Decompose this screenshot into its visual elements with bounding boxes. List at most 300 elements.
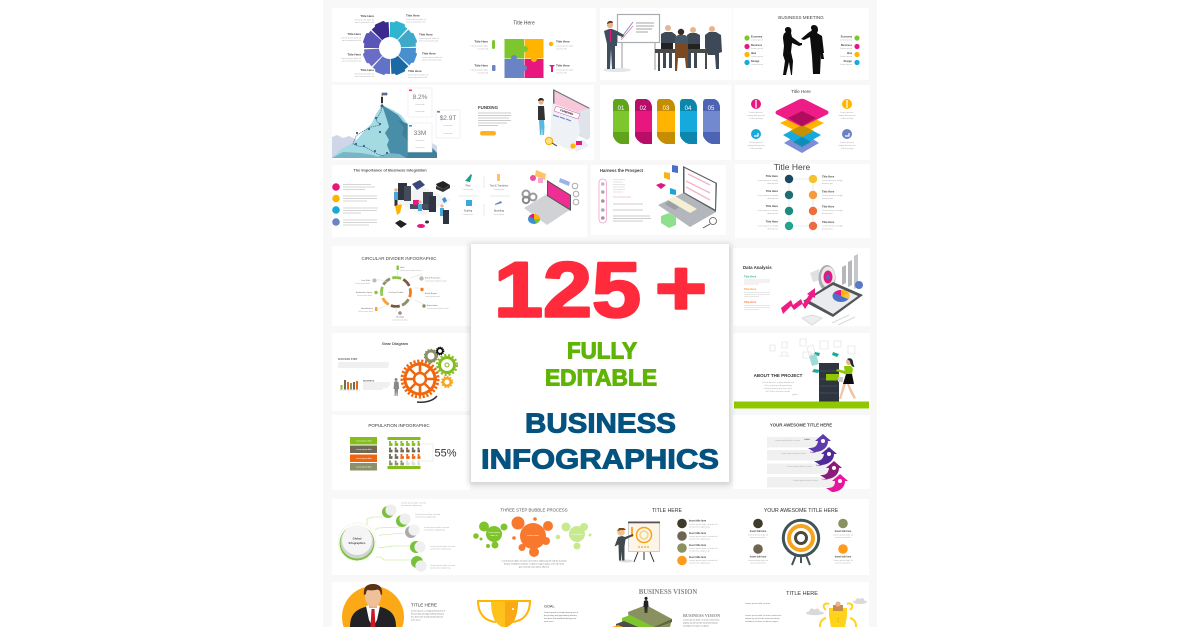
- funding person: [538, 98, 545, 135]
- headline number: 125: [494, 246, 641, 334]
- vision text: adipiscing elit sed do eiusmod tempor: [683, 622, 718, 624]
- process texts: Lorem ipsum dolor sit amet: [430, 564, 455, 567]
- magnifier and documents: [545, 137, 589, 152]
- process texts: consectetur adipiscing: [430, 548, 451, 550]
- panel: gear diagram: [332, 333, 470, 411]
- gear ring labels: Title Here: [419, 32, 433, 36]
- left icon list: [744, 35, 763, 66]
- trainer legend text: consectetur adipiscing: [689, 550, 710, 552]
- businessman text: ever since: [411, 618, 421, 622]
- tab 02: 02: [640, 106, 647, 112]
- funding body text: [478, 113, 511, 126]
- puzzle labels: Lorem ipsum dolor: [556, 44, 574, 48]
- about body: of the printing and typesetting: [764, 384, 792, 387]
- orange circle with portrait: [342, 584, 404, 627]
- gear ring labels: Title Here: [360, 14, 374, 18]
- puzzle labels: sit amet elit: [556, 72, 567, 74]
- puzzle icons: [492, 40, 555, 72]
- right icon list: [840, 35, 860, 66]
- left timeline nodes: Title Here: [766, 174, 779, 178]
- ring labels: Evaluation Group: [356, 291, 373, 294]
- gear ring labels: amet consectetur elit: [408, 76, 428, 79]
- process texts: consectetur adipiscing: [430, 566, 451, 570]
- feature labels: Lorem ipsum: [494, 189, 505, 191]
- target legend: amet consectetur: [750, 536, 766, 539]
- stat card: 33M: [408, 123, 432, 152]
- mountain illustration: [332, 93, 437, 158]
- layer captions: of the printing: [750, 147, 763, 150]
- layer captions: simply dummy text: [747, 144, 765, 147]
- about body: galley: [792, 394, 799, 396]
- puzzle labels: Lorem ipsum dolor: [471, 44, 488, 48]
- mascot text: incididunt ut labore et dolore magna: [745, 620, 779, 623]
- bubble captions: dolor sit: [490, 534, 498, 537]
- pink pill with icons: [599, 179, 606, 223]
- target stand: [792, 555, 810, 565]
- stacked diamonds: [776, 99, 828, 153]
- about body: the 1500s unknown printer: [766, 390, 791, 393]
- layer captions: of the printing: [841, 147, 854, 150]
- right icon list: Lorem ipsum: [840, 47, 852, 50]
- data analysis notes: Title Here: [744, 274, 757, 278]
- right timeline nodes: Title Here: [822, 190, 835, 194]
- left icon list: Lorem ipsum: [751, 63, 763, 66]
- about title: ABOUT THE PROJECT: [754, 373, 803, 378]
- panel: puzzle: [460, 8, 596, 82]
- right timeline nodes: Title Here: [822, 220, 835, 224]
- left timeline nodes: Lorem ipsum is simply: [757, 179, 779, 182]
- fully editable label: FULLY: [567, 338, 637, 364]
- trainer legend text: Lorem ipsum dolor sit amet elit: [689, 535, 718, 538]
- grey text bars: Lorem ipsum dolor sit amet: [781, 452, 806, 455]
- target legend: Lorem ipsum dolor sit: [833, 559, 853, 562]
- gear text: BUSINESS: [363, 380, 375, 382]
- population stacked labels: Lorem ipsum dolor: [356, 448, 372, 451]
- ring labels: Expectation: [427, 304, 439, 307]
- timeline title: Title Here: [774, 162, 811, 172]
- puzzle labels: sit amet elit: [556, 48, 567, 50]
- puzzle labels: sit amet elit: [477, 72, 488, 74]
- gear ring labels: Title Here: [406, 14, 420, 18]
- right timeline nodes: dummy text: [822, 212, 833, 215]
- left icon list: Economy: [751, 36, 763, 38]
- left timeline nodes: dummy text: [767, 228, 778, 230]
- collage backdrop: [323, 0, 877, 627]
- layer captions: of the printing: [841, 117, 854, 120]
- feature labels: [463, 184, 509, 216]
- right icon list: Lorem ipsum: [840, 55, 852, 58]
- business vision title: BUSINESS VISION: [639, 589, 697, 596]
- gear ring labels: Lorem ipsum dolor sit: [341, 57, 361, 60]
- right icon list: Idea: [847, 52, 853, 55]
- about body: Lorem ipsum is simply dummy text: [762, 381, 794, 384]
- businessman text: Lorem ipsum is simply dummy text of: [411, 610, 446, 612]
- stat card: $2.9T: [436, 110, 460, 138]
- target legend: Insert title here: [750, 556, 767, 558]
- funding button: [480, 131, 496, 136]
- ring labels: Strategy: [396, 316, 405, 318]
- puzzle pieces: [504, 39, 544, 78]
- gear ring labels: Lorem ipsum dolor sit: [341, 36, 361, 40]
- right timeline nodes: [809, 174, 844, 230]
- stat card: 33M: Lorem ipsum: [415, 147, 425, 149]
- book figure: [643, 597, 649, 613]
- gear ring labels: Lorem ipsum dolor sit: [408, 74, 428, 76]
- ring labels: Lorem ipsum dolor: [358, 311, 373, 313]
- stat card: 33M: 33M: [414, 130, 426, 137]
- businessman title: TITLE HERE: [411, 602, 437, 608]
- left icon list: Idea: [751, 52, 757, 55]
- process texts: Lorem ipsum dolor sit amet: [430, 545, 455, 548]
- trainer legend text: Lorem ipsum dolor sit amet elit: [689, 547, 718, 550]
- gear ring labels: Lorem ipsum dolor sit: [422, 56, 442, 59]
- gear ring labels: amet consectetur elit: [342, 39, 361, 42]
- panel: gear ring: [332, 8, 460, 82]
- stat card: 8.2%: [408, 88, 432, 117]
- harness title: Harness the Prospect: [600, 168, 644, 173]
- mascot text: Lorem ipsum dolor sit amet consectetur: [745, 614, 782, 617]
- about body: [762, 381, 799, 396]
- right timeline nodes: dummy text: [822, 197, 833, 200]
- gear ring labels: Title Here: [347, 52, 361, 56]
- about body: industry dummy text ever since: [764, 387, 793, 390]
- bubble title: THREE STEP BUBBLE PROCESS: [500, 508, 568, 512]
- right timeline nodes: Lorem ipsum is simply: [822, 194, 844, 197]
- data analysis arrows: [802, 315, 855, 325]
- layer captions: Lorem ipsum is: [749, 141, 763, 144]
- goal title: GOAL: [544, 604, 555, 608]
- presenter: [603, 21, 631, 72]
- right timeline nodes: Lorem ipsum is simply: [822, 179, 844, 182]
- stat card: 8.2%: 8.2%: [413, 94, 428, 101]
- puzzle labels: Lorem ipsum dolor: [556, 68, 574, 72]
- gear ring labels: [341, 14, 442, 79]
- panel: title here timeline: [735, 162, 870, 238]
- puzzle labels: Title Here: [474, 64, 488, 68]
- stat card: 8.2%: Lorem ipsum: [415, 104, 425, 106]
- right icon list: Business: [841, 44, 853, 47]
- feature icons: [465, 174, 502, 206]
- target legend: Insert title here: [750, 530, 767, 533]
- stat card: $2.9T: Lorem ipsum: [443, 125, 453, 127]
- feature labels: Scaling: [464, 210, 473, 212]
- panel: target: [734, 499, 869, 575]
- bubble text: quis nostrud exercitation ullamco: [519, 566, 550, 568]
- ring labels: Goal: [400, 267, 405, 269]
- layer captions: Lorem ipsum is: [749, 111, 763, 114]
- process nodes: [382, 504, 427, 572]
- gear person: [394, 378, 399, 396]
- mascot text: Lorem ipsum dolor sit amet: [745, 602, 770, 605]
- panel: meeting presentation: [600, 8, 732, 80]
- green bubbles: [473, 522, 508, 548]
- goal text: Lorem ipsum is simply dummy text of: [544, 611, 579, 614]
- funding title: FUNDING: [478, 105, 499, 110]
- grey text bars: [767, 437, 837, 488]
- mascot title: TITLE HERE: [786, 591, 818, 597]
- ring labels: Lorem ipsum dolor: [357, 295, 372, 297]
- grey text bars: Label: [810, 452, 816, 454]
- ring center label: Circular Divider: [389, 291, 404, 294]
- gear ring labels: Title Here: [360, 68, 374, 72]
- process texts: Lorem ipsum dolor sit amet: [401, 502, 426, 504]
- stat card: $2.9T: $2.9T: [440, 115, 456, 122]
- goal text: ever since: [544, 620, 554, 623]
- harness laptop: [656, 165, 717, 228]
- layer captions: simply dummy text: [838, 114, 856, 117]
- panel: three step bubble: [467, 499, 602, 575]
- right icon list: Lorem ipsum: [840, 63, 852, 66]
- layer captions: simply dummy text: [838, 144, 856, 147]
- harness text: [613, 180, 651, 221]
- panel: data analysis: [733, 248, 870, 326]
- population stacked labels: [350, 437, 377, 470]
- target legend: Insert title here: [835, 556, 852, 558]
- tab 03: 03: [663, 106, 670, 112]
- trainer board: [628, 522, 660, 562]
- feature labels: Tool & Transition: [490, 184, 509, 188]
- laptop illustration: [522, 170, 579, 225]
- mascot text: [745, 602, 782, 623]
- ring labels: Lorem ipsum dolor sit amet: [425, 280, 447, 282]
- population title: POPULATION INFOGRAPHIC: [368, 423, 430, 428]
- process texts: consectetur adipiscing: [401, 504, 422, 507]
- stacked books: [612, 605, 672, 627]
- vision text: [683, 618, 720, 627]
- bubble captions: [488, 532, 583, 537]
- layer captions: Lorem ipsum is: [840, 141, 854, 144]
- gear ring labels: Lorem ipsum dolor sit: [354, 18, 374, 22]
- panel: harness the prospect: [591, 165, 726, 235]
- bullseye: [782, 519, 820, 557]
- layer captions: [747, 111, 856, 150]
- trainer legend text: Insert title here: [689, 556, 707, 559]
- data analysis notes: Title Here: [744, 300, 757, 304]
- ring labels: Lorem ipsum dolor: [355, 283, 370, 285]
- population stacked labels: Lorem ipsum dolor: [356, 457, 372, 460]
- branch connectors: [367, 517, 414, 560]
- trainer legend text: Insert title here: [689, 532, 707, 535]
- left timeline nodes: dummy text: [767, 182, 778, 185]
- feature labels: Lorem ipsum: [463, 189, 474, 191]
- puzzle labels: Title Here: [474, 40, 488, 44]
- right timeline nodes: dummy text: [822, 228, 833, 230]
- population percentage: 55%: [434, 448, 457, 460]
- puzzle labels: Title Here: [556, 64, 570, 68]
- stat card: $2.9T: Lorem ipsum: [443, 133, 453, 135]
- businessman text: [411, 610, 446, 622]
- population stacked labels: Lorem ipsum dolor: [356, 440, 372, 442]
- panel: awesome title arrows: [733, 415, 870, 492]
- target legend: amet consectetur: [835, 562, 851, 564]
- trainer legend text: Lorem ipsum dolor sit amet elit: [689, 523, 718, 526]
- right icon list: Economy: [841, 36, 853, 38]
- tab 05: 05: [708, 106, 715, 112]
- left icon list: Lorem ipsum: [751, 47, 763, 50]
- funding monitor: FUNDING: [560, 108, 575, 116]
- gear text: SUCCESS STEP: [338, 358, 358, 361]
- ring leaders and nodes: [371, 266, 426, 315]
- ring labels: Lorem ipsum dolor sit amet: [400, 269, 422, 272]
- grey text bars: Label: [804, 439, 810, 441]
- left timeline nodes: Lorem ipsum is simply: [757, 209, 779, 212]
- target legend: [748, 519, 853, 564]
- ring labels: Lorem ipsum dolor sit amet: [427, 307, 449, 310]
- gear ring labels: amet consectetur elit: [419, 40, 439, 42]
- meeting table: [655, 42, 710, 71]
- bubble captions: Lorem ipsum: [488, 532, 500, 534]
- light green bubbles: [556, 522, 592, 550]
- floating papers: [770, 339, 855, 373]
- bubble captions: Lorem ipsum: [527, 535, 539, 537]
- left timeline nodes: Title Here: [766, 189, 779, 193]
- large circle hub: Infographics: [349, 541, 366, 545]
- data analysis title: Data Analysis: [743, 265, 772, 270]
- right icon list: Design: [844, 60, 852, 63]
- population stacked labels: Lorem ipsum dolor: [356, 466, 372, 468]
- trainer legend dots: [677, 519, 687, 565]
- fully editable label: EDITABLE: [545, 364, 657, 390]
- pink growth arrow: [781, 288, 815, 314]
- bubble text: tempor incididunt ut labore et dolore magna aliqua enim ad minim: [504, 562, 564, 566]
- isometric bars: [842, 254, 858, 289]
- vision text: Lorem ipsum dolor sit amet consectetur: [683, 618, 720, 622]
- feature labels: Pilot: [466, 184, 471, 188]
- trainer legend text: consectetur adipiscing: [689, 538, 710, 540]
- trainer legend text: Insert title here: [689, 544, 707, 547]
- business infographics label: INFOGRAPHICS: [481, 444, 719, 474]
- panel: stacked layers: [735, 85, 870, 160]
- left timeline nodes: Title Here: [766, 204, 779, 208]
- trainer legend text: consectetur adipiscing: [689, 562, 710, 564]
- population people grid: [388, 437, 420, 469]
- process texts: consectetur adipiscing: [424, 528, 445, 532]
- puzzle labels: sit amet elit: [477, 48, 488, 50]
- panel: four features: [457, 165, 587, 237]
- right timeline nodes: dummy text: [822, 182, 833, 185]
- trainer figure: [614, 528, 634, 562]
- gear cluster: [402, 347, 457, 402]
- woman with folder: [836, 358, 856, 399]
- panel: business vision: [602, 582, 734, 627]
- grey text bars: Lorem ipsum dolor sit amet: [775, 439, 800, 442]
- businessman text: the printing and typesetting industry: [411, 612, 445, 616]
- feature labels: Lorem ipsum: [463, 214, 474, 216]
- target legend: amet consectetur: [750, 562, 766, 564]
- right timeline nodes: Lorem ipsum is simply: [822, 209, 844, 212]
- panel: population infographic: [332, 415, 470, 490]
- gear bar chart: [339, 380, 360, 390]
- layer captions: simply dummy text: [747, 114, 765, 117]
- integration title: The Importance of Business Integration: [353, 168, 427, 172]
- curved arrow stack: [808, 434, 848, 492]
- process texts: Lorem ipsum dolor sit amet: [424, 526, 449, 529]
- fully editable label: [545, 338, 657, 390]
- feature labels: Lorem ipsum: [494, 214, 505, 216]
- grey text bars: Label: [822, 479, 828, 481]
- trainer title: TITLE HERE: [652, 508, 683, 514]
- gear ring labels: amet consectetur elit: [422, 58, 442, 62]
- gear ring labels: amet consectetur elit: [342, 60, 361, 62]
- trainer legend text: [689, 520, 718, 564]
- data analysis notes: [744, 274, 770, 310]
- target legend: Lorem ipsum dolor sit: [748, 559, 768, 562]
- feature labels: Branding: [494, 210, 505, 212]
- data analysis notes: Title Here: [744, 287, 757, 291]
- panel: trophy goal: [467, 582, 602, 627]
- presentation board: [618, 14, 660, 70]
- gear ring labels: amet consectetur elit: [355, 75, 374, 78]
- bubble text: [502, 560, 567, 568]
- left timeline nodes: Lorem ipsum is simply: [757, 194, 779, 197]
- target legend: Lorem ipsum dolor sit: [833, 534, 853, 536]
- right timeline nodes: Lorem ipsum is simply: [822, 224, 844, 228]
- timeline connectors: [789, 179, 813, 226]
- bubble text: Lorem ipsum dolor sit amet consectetur adipiscing elit sed do eiusmod: [502, 560, 567, 562]
- ring labels: Email Buyers: [425, 292, 437, 295]
- left timeline nodes: [757, 174, 793, 230]
- tab 04: 04: [685, 106, 692, 112]
- vision subtitle: BUSINESS VISION: [683, 613, 721, 618]
- panel: business meeting: [733, 8, 869, 80]
- gear ring labels: Lorem ipsum dolor sit: [419, 37, 439, 40]
- panel: numbered tabs: [600, 85, 731, 160]
- goal text: the printing and typesetting industry: [544, 614, 578, 617]
- thumbnail collage: [332, 8, 870, 627]
- business meeting title: BUSINESS MEETING: [778, 15, 824, 20]
- businessman text: has been the standard dummy text: [411, 616, 443, 618]
- left timeline nodes: dummy text: [767, 212, 778, 215]
- layer captions: of the printing: [750, 117, 763, 120]
- panel: global infographic process: [332, 499, 467, 575]
- grey text bars: Lorem ipsum dolor sit amet: [793, 479, 818, 482]
- right timeline nodes: Title Here: [822, 204, 835, 208]
- panel: title here mascot: [734, 582, 869, 627]
- gear ring chart: [357, 15, 423, 81]
- puzzle labels: [471, 40, 574, 74]
- file cabinet: [819, 363, 843, 402]
- target legend: amet consectetur: [835, 536, 851, 539]
- handshake silhouettes: [783, 25, 824, 75]
- isometric server room: [393, 180, 451, 228]
- gear ring labels: amet consectetur elit: [355, 21, 374, 24]
- feature dividers: [459, 176, 510, 216]
- right icon list: Lorem ipsum: [840, 38, 852, 42]
- panel: about the project: [733, 333, 870, 409]
- ring labels: Lost Sale: [361, 279, 371, 282]
- right timeline nodes: Title Here: [822, 174, 835, 178]
- mascot text: adipiscing elit sed do eiusmod tempor: [745, 617, 780, 620]
- target legend: Lorem ipsum dolor sit: [748, 534, 768, 536]
- integration icon list: [332, 183, 378, 226]
- ring labels: [355, 267, 449, 322]
- target legend: Insert title here: [835, 530, 852, 533]
- gear text: [338, 358, 390, 389]
- gear ring labels: Lorem ipsum dolor sit: [354, 72, 374, 76]
- large circle hub: Global: [353, 536, 362, 540]
- circular ring: [376, 272, 416, 312]
- center card: [469, 244, 731, 485]
- large circle hub: [338, 523, 376, 561]
- panel: title here trainer: [602, 499, 734, 575]
- ring labels: Lorem ipsum dolor: [425, 296, 440, 298]
- puzzle labels: Title Here: [556, 40, 570, 44]
- panel: business integration: [332, 165, 457, 237]
- process texts: Lorem ipsum dolor sit amet: [415, 513, 440, 516]
- gear diagram title: Gear Diagram: [382, 341, 409, 346]
- ring labels: Email Promotion: [425, 276, 441, 280]
- goal text: has been the standard dummy text: [544, 617, 576, 620]
